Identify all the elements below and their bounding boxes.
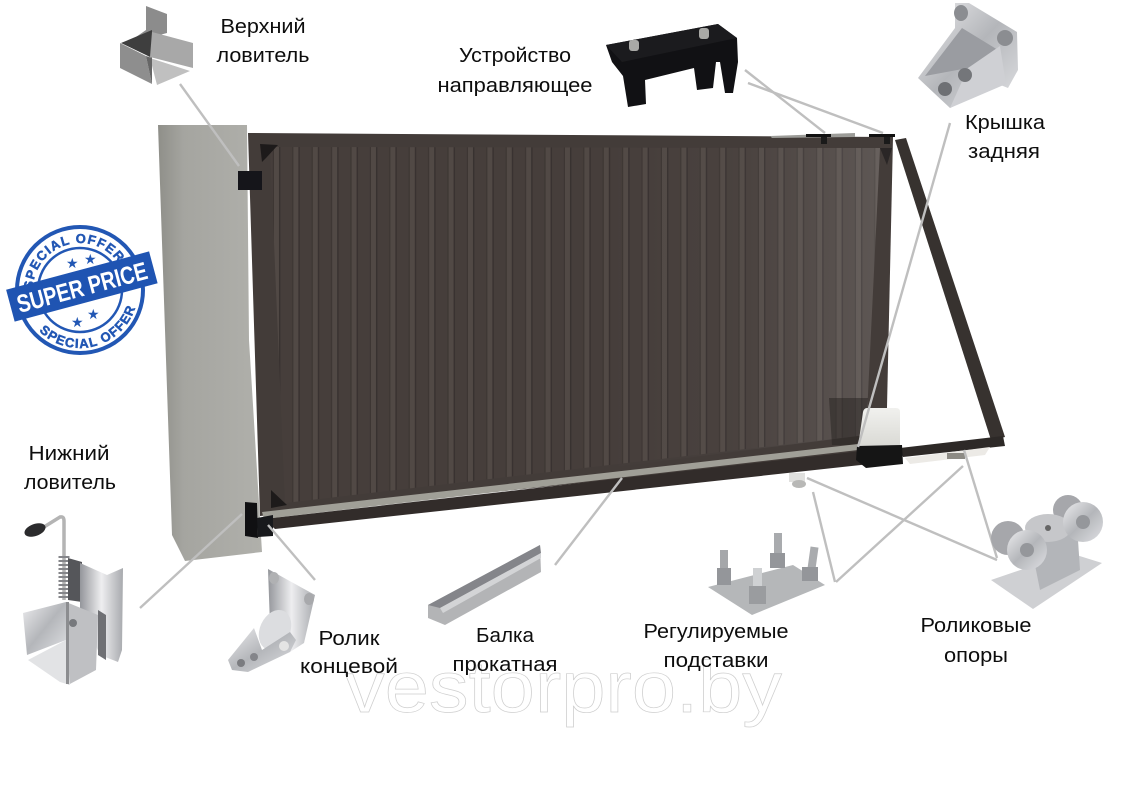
icon: lower catcher	[23, 517, 123, 685]
label: rolled rail: прокатная	[452, 653, 558, 676]
corrugated panel	[270, 147, 880, 503]
bottom catcher on gate	[245, 502, 273, 538]
gate	[238, 133, 1005, 538]
icon: guide device	[606, 24, 738, 107]
top catcher on gate	[238, 171, 262, 190]
label: end roller	[300, 627, 398, 678]
label: lower catcher: ловитель	[24, 471, 116, 494]
label: adjustable stands: подставки	[664, 649, 768, 672]
label: lower catcher	[24, 442, 116, 494]
lower beam	[264, 450, 870, 529]
stamp stars: ★	[66, 256, 79, 272]
label: guide device: Устройство	[459, 44, 571, 67]
label: rear cover: Крышка	[965, 111, 1046, 134]
gusset corners	[260, 144, 892, 508]
stamp stars: ★	[84, 252, 97, 268]
line: lower catcher	[140, 514, 242, 608]
label: guide device	[438, 44, 592, 97]
top guide plate on gate	[770, 133, 895, 144]
label: roller carriages: опоры	[944, 644, 1008, 667]
line: stand left	[813, 492, 835, 582]
roller foot under gate	[789, 447, 990, 488]
label: rear cover	[965, 111, 1046, 163]
gate frame	[248, 133, 893, 516]
line: stand right	[836, 466, 963, 582]
steel guide rail	[262, 444, 858, 519]
line: guide device left	[745, 70, 825, 133]
icon: rear cover bracket	[918, 3, 1018, 108]
stamp ring text bottom: SPECIAL OFFER	[40, 306, 136, 348]
label: lower catcher: Нижний	[28, 442, 110, 465]
stamp stars: ★	[71, 315, 84, 331]
line: carriage left	[807, 478, 997, 560]
motor shadow on panel	[829, 398, 868, 445]
label: roller carriages	[920, 614, 1032, 667]
label: rolled rail: Балка	[476, 624, 535, 647]
triangular counterweight frame	[895, 138, 1005, 457]
concrete pillar	[158, 125, 262, 561]
icon: end roller	[228, 569, 315, 672]
label: adjustable stands: Регулируемые	[644, 620, 788, 643]
label: guide device: направляющее	[438, 74, 592, 97]
line: carriage right	[964, 450, 997, 558]
label: roller carriages: Роликовые	[920, 614, 1032, 637]
stamp stars: ★	[87, 307, 100, 323]
label: rear cover: задняя	[968, 140, 1040, 163]
line: end roller	[268, 525, 315, 580]
icon: adjustable stand	[708, 533, 825, 615]
watermark: vestorpro.by	[345, 648, 782, 728]
line: rear cover	[858, 123, 950, 447]
label: end roller: концевой	[300, 655, 398, 678]
line: top catcher	[180, 84, 239, 166]
stamp ring text top: SPECIAL OFFER	[24, 234, 124, 285]
line: rail beam	[555, 478, 622, 565]
icon: top catcher	[120, 6, 193, 85]
label: top catcher: ловитель	[216, 44, 310, 67]
label: rolled rail	[452, 624, 558, 676]
icon: rolled rail	[428, 545, 541, 625]
callout lines	[140, 70, 997, 608]
label: top catcher	[216, 15, 310, 67]
icon: roller carriage	[991, 495, 1103, 609]
motor drive	[856, 408, 903, 468]
label: top catcher: Верхний	[220, 15, 306, 38]
stamp: super price	[6, 225, 158, 355]
stamp banner: SUPER PRICE	[14, 257, 151, 319]
label: adjustable stands	[644, 620, 788, 672]
label: end roller: Ролик	[318, 627, 381, 650]
line: guide device right	[748, 83, 883, 133]
